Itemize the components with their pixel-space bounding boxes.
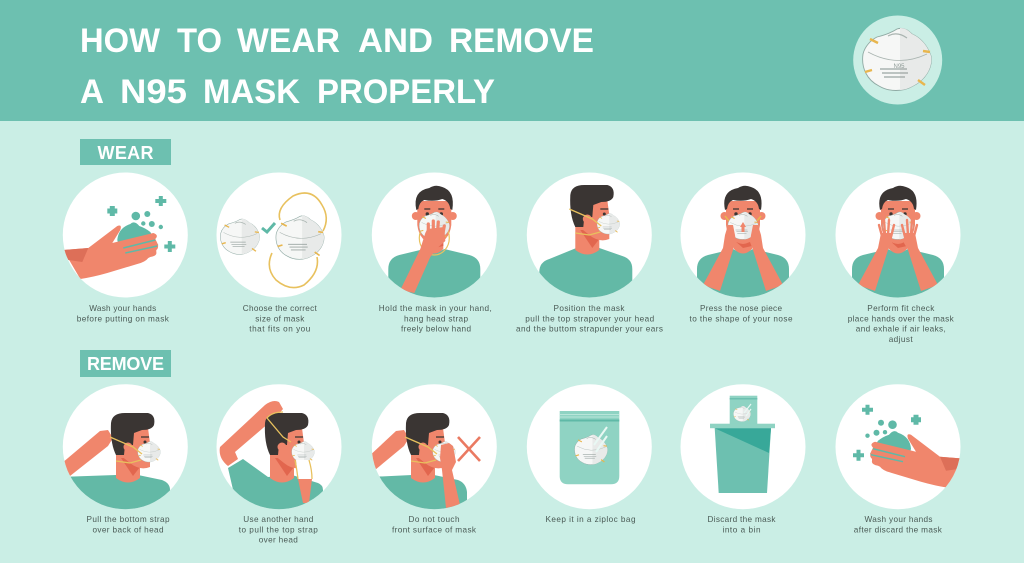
icon: man holding mask [372,172,497,305]
panel: ziploc bag [527,384,652,524]
caption: before putting on mask [77,314,170,324]
title: TO [177,22,222,60]
caption: to the shape of your nose [690,314,793,324]
panel: pull top strap [216,384,342,544]
caption [243,304,318,334]
caption: Use another hand [243,515,314,524]
panel: hold mask [372,172,497,334]
caption: Pull the bottom strap [86,515,170,524]
icon: washing hand mirrored [836,384,965,509]
caption: pull the top strapover your head [525,314,655,324]
icon: man with hand near mask and red cross [372,384,497,510]
panel: wash hands after [836,384,965,534]
panel: press nose piece [680,172,806,324]
icon: two masks with check [216,172,342,298]
icon: N95 mask badge [853,16,942,104]
title: HOW [80,22,160,60]
panel: choose size [216,172,342,334]
panel: do not touch [365,384,497,534]
caption: Hold the mask in your hand, [379,304,492,313]
caption: freely below hand [401,324,471,334]
caption [690,304,793,324]
panel: discard in bin [680,384,806,534]
caption [77,304,170,324]
panel: wash hands [63,172,188,324]
caption: hang head strap [404,314,468,324]
icon: man pulling top strap with raised arm [216,384,342,520]
heading: remove: REMOVE [87,354,164,374]
caption [848,304,955,344]
caption: to pull the top strap [239,525,318,534]
caption: Perform fit check [867,304,935,313]
caption: Wash your hands [89,304,156,313]
caption [708,515,776,534]
caption: adjust [889,335,913,344]
caption: front surface of mask [392,525,477,534]
panel: position mask [516,172,663,334]
caption: Keep it in a ziploc bag [546,515,636,524]
panel: fit check [836,172,960,344]
caption: place hands over the mask [848,314,955,324]
caption: Discard the mask [708,515,776,524]
title: WEAR [237,22,340,60]
caption: size of mask [255,314,305,324]
caption: Position the mask [554,304,625,313]
heading: remove [80,350,171,377]
icon: man pulling bottom strap [60,384,188,520]
title: N95 [120,73,187,111]
caption: into a bin [722,525,761,534]
header band [0,0,1024,121]
title [80,22,594,111]
icon: N95 mask badge: N95 [893,64,905,70]
title: AND [358,22,433,60]
caption [86,515,170,534]
caption: and exhale if air leaks, [856,324,946,334]
icon: mask in ziploc bag [527,384,652,509]
caption: Wash your hands [864,515,932,524]
caption: Press the nose piece [700,304,782,313]
caption: Choose the correct [243,304,318,313]
icon: bin with bagged mask [680,384,806,509]
caption [239,515,318,544]
icon: man in profile wearing mask [527,172,652,305]
caption [516,304,663,334]
icon: man pressing nose piece [680,172,806,305]
title: A [80,73,104,111]
heading: wear [80,139,171,165]
caption: Do not touch [408,515,460,524]
title: PROPERLY [317,73,495,111]
heading: wear: WEAR [98,143,154,163]
caption: over back of head [92,525,164,534]
caption [392,515,477,534]
panel: pull bottom strap [60,384,188,534]
icon: man doing fit check [836,172,960,305]
icon: washing hand [63,172,188,298]
caption: over head [259,536,298,544]
title: MASK [203,73,300,111]
caption [854,515,943,534]
caption: and the buttom strapunder your ears [516,324,663,334]
caption: after discard the mask [854,525,943,534]
caption: that fits on you [249,324,311,334]
caption [379,304,492,334]
title: REMOVE [449,22,594,60]
